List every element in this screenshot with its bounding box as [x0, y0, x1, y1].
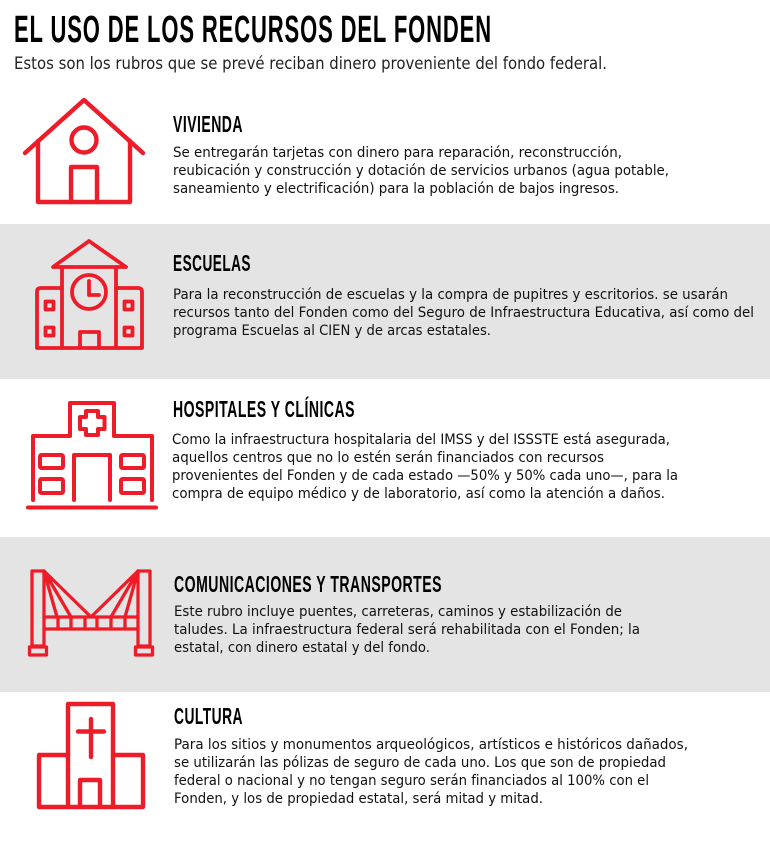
text block: cultura: [174, 737, 688, 807]
text block: vivienda: Se entregarán tarjetas con dinero para reparación, reconstrucción,: [173, 145, 622, 161]
text block: comunicaciones: estatal, con dinero estatal y del fondo.: [174, 640, 430, 656]
text block: comunicaciones: [174, 604, 640, 656]
text block: vivienda: saneamiento y electrificación) para la población de bajos ingresos.: [173, 181, 619, 197]
heading: escuelas: ESCUELAS: [173, 250, 251, 276]
text block: vivienda: [173, 145, 669, 197]
text block: hospitales: [172, 432, 678, 502]
icon: church: [39, 704, 143, 807]
subtitle: Estos son los rubros que se prevé reciban dinero proveniente del fondo federal.: [14, 54, 607, 73]
text block: escuelas: [173, 287, 754, 339]
text block: cultura: se utilizarán las pólizas de seguro de cada uno. Los que son de propiedad: [174, 755, 666, 771]
text block: escuelas: programa Escuelas al CIEN y de arcas estatales.: [173, 323, 491, 339]
text block: vivienda: reubicación y construcción y dotación de servicios urbanos (agua potable,: [173, 163, 669, 179]
text block: escuelas: recursos tanto del Fonden como del Seguro de Infraestructura Educativa, así como del: [173, 305, 754, 321]
text block: escuelas: Para la reconstrucción de escuelas y la compra de pupitres y escritorios. se usarán: [173, 287, 728, 303]
icon: school: [37, 241, 142, 348]
heading: comunicaciones y transportes: COMUNICACIONES Y TRANSPORTES: [174, 571, 442, 597]
text block: hospitales: Como la infraestructura hospitalaria del IMSS y del ISSSTE está asegurada,: [172, 432, 670, 448]
text block: hospitales: aquellos centros que no lo estén serán financiados con recursos: [172, 450, 604, 466]
icon: bridge: [30, 571, 152, 655]
text block: comunicaciones: Este rubro incluye puentes, carreteras, caminos y estabilización de: [174, 604, 622, 620]
icon: hospital: [28, 403, 156, 508]
icon: house: [25, 100, 143, 202]
text block: hospitales: compra de equipo médico y de laboratorio, así como la atención a daños.: [172, 486, 665, 502]
text block: cultura: Fonden, y los de propiedad estatal, será mitad y mitad.: [174, 791, 543, 807]
text block: cultura: federal o nacional y no tengan seguro serán financiados al 100% con el: [174, 773, 649, 789]
text block: cultura: Para los sitios y monumentos arqueológicos, artísticos e históricos dañados,: [174, 737, 688, 753]
heading: vivienda: VIVIENDA: [173, 111, 243, 137]
heading: hospitales y clinicas: HOSPITALES Y CLÍNICAS: [173, 395, 355, 422]
text block: hospitales: provenientes del Fonden y de cada estado —50% y 50% cada uno—, para la: [172, 468, 678, 484]
heading: cultura: CULTURA: [174, 703, 243, 729]
text block: comunicaciones: taludes. La infraestructura federal será rehabilitada con el Fonden; la: [174, 622, 640, 638]
